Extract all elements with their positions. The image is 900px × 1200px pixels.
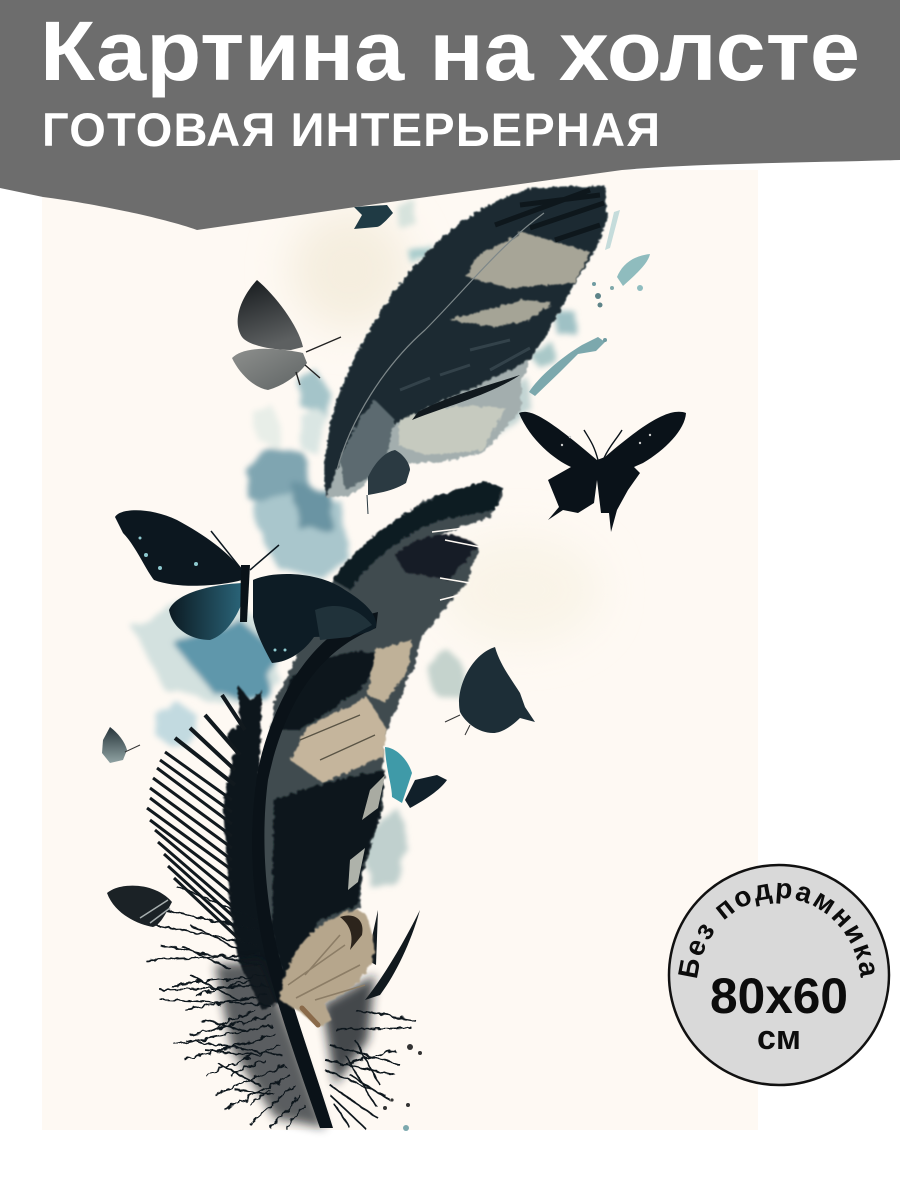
blade <box>258 482 502 1010</box>
header banner <box>0 0 900 230</box>
quill <box>252 612 378 1128</box>
butterfly: right black <box>519 412 686 532</box>
size: 80х60 <box>710 968 848 1024</box>
feather: upper <box>324 186 607 497</box>
left dark vane <box>223 685 285 1010</box>
butterfly: right middle <box>445 647 535 735</box>
splashes <box>383 210 650 1131</box>
tan patch <box>290 697 387 783</box>
tan small feather <box>280 910 374 1027</box>
title: Картина на холсте <box>40 4 860 98</box>
butterfly: small left <box>102 727 140 763</box>
dark lower blade <box>272 770 385 985</box>
feather: lower main <box>145 482 502 1128</box>
middle dark stripes <box>280 652 385 730</box>
butterfly: top small <box>354 205 393 229</box>
unit: см <box>757 1019 801 1057</box>
curved label: Без подрамника <box>678 882 874 978</box>
right spikes <box>365 910 420 1000</box>
canvas artwork <box>42 170 758 1131</box>
butterfly: large blue-black <box>115 510 376 663</box>
butterfly: small on upper feather <box>367 450 410 514</box>
butterfly: lower left <box>107 886 172 927</box>
size badge <box>668 864 890 1086</box>
butterfly: teal <box>385 747 447 808</box>
subtitle: ГОТОВАЯ ИНТЕРЬЕРНАЯ <box>42 103 660 156</box>
watercolor washes <box>130 203 650 1131</box>
white barb gaps <box>432 525 490 600</box>
downy barbs <box>145 885 415 1128</box>
left barbs <box>147 695 245 940</box>
butterfly: grey upper left <box>232 280 341 390</box>
